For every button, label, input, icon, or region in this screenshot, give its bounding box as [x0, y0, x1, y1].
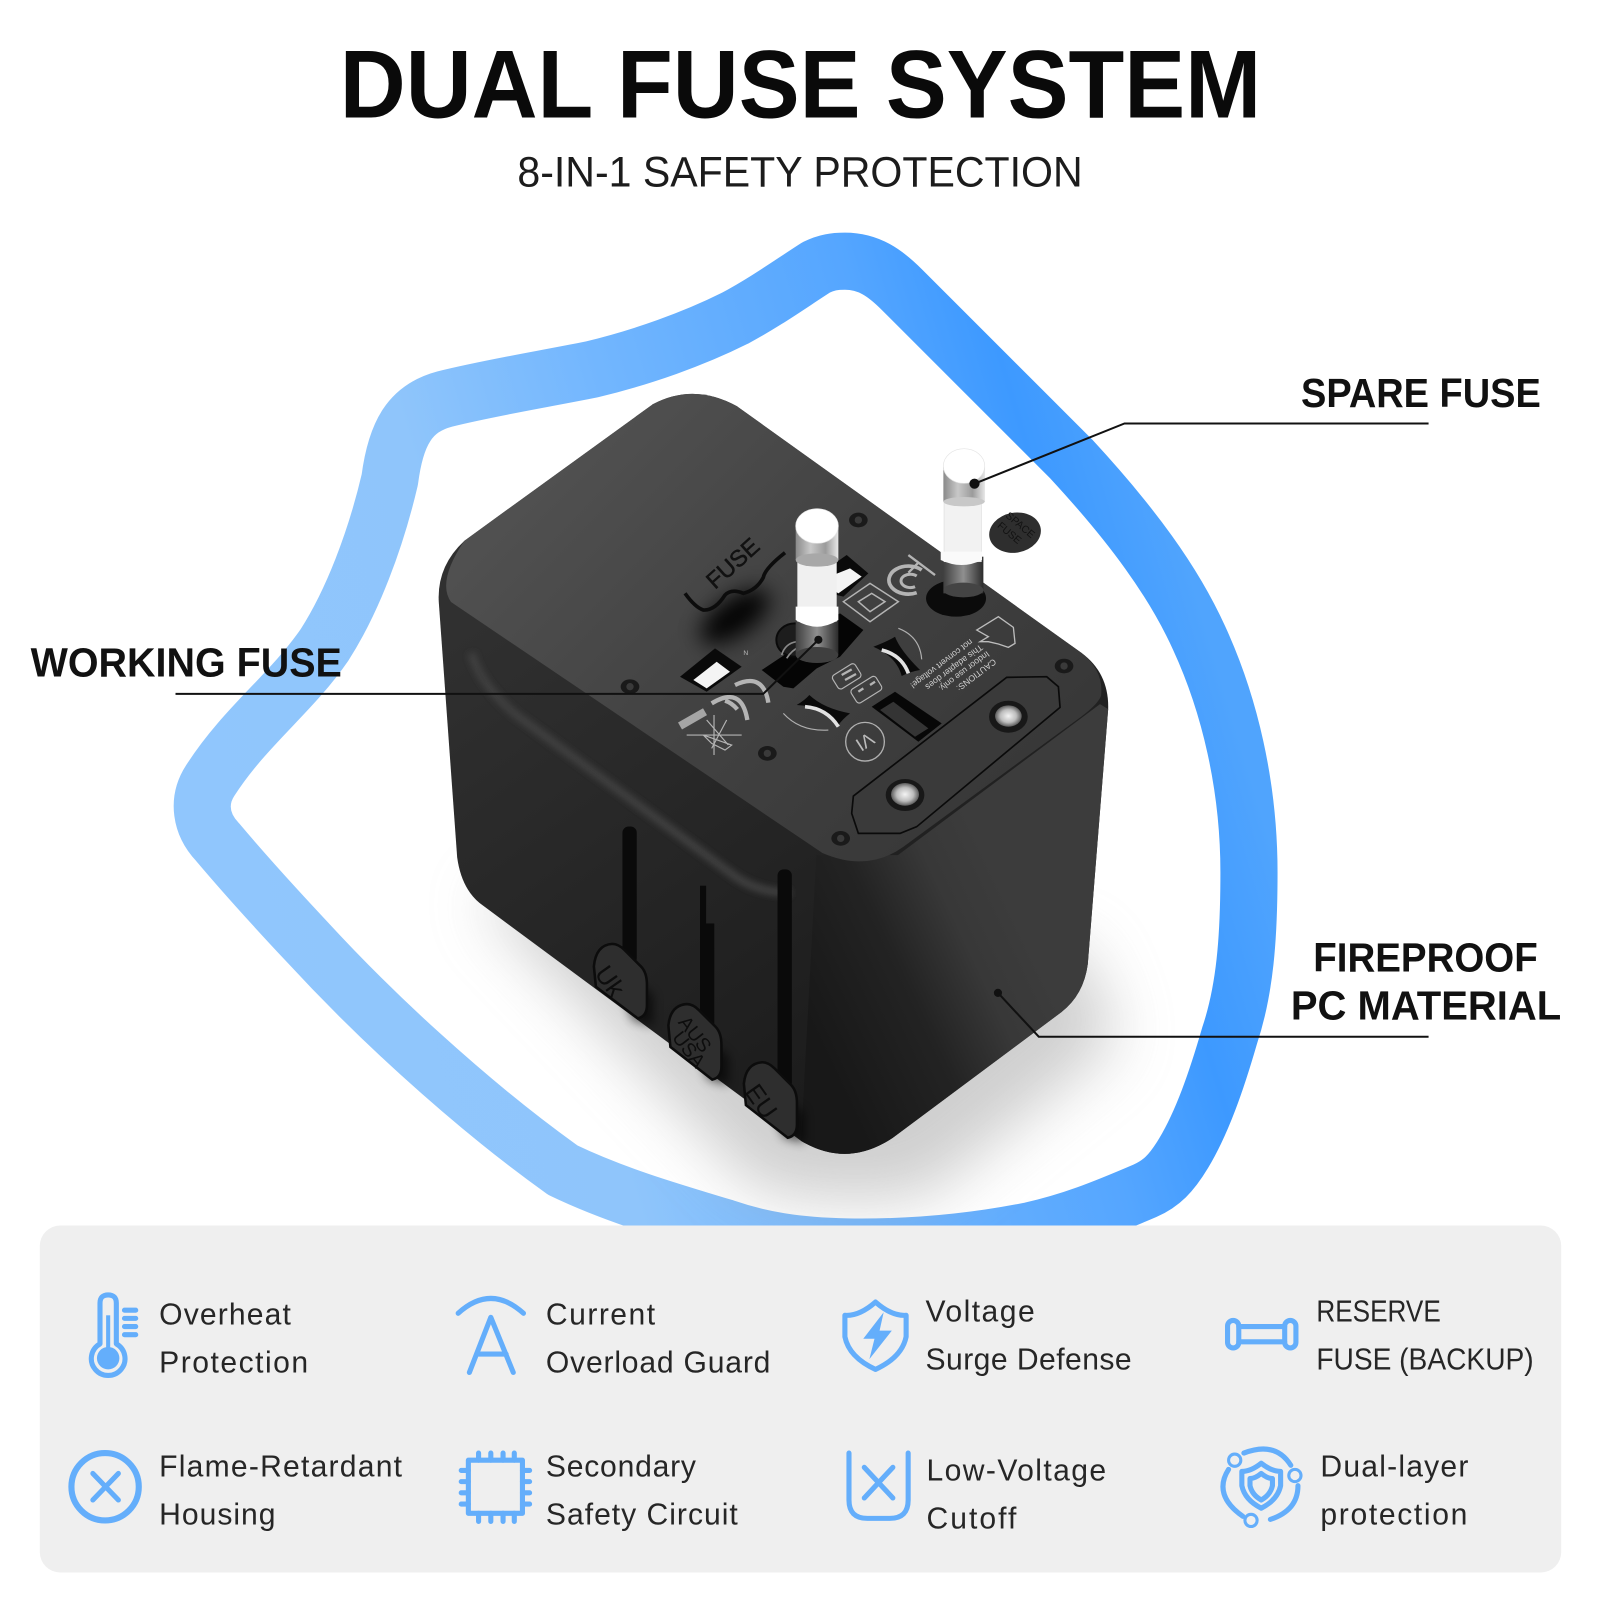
slider slots [622, 827, 792, 1089]
text: reserve fuse backup: FUSE (BACKUP) [1316, 1343, 1534, 1376]
caution text: CAUTIONS: [955, 657, 998, 693]
callout line: spare fuse [969, 423, 1429, 489]
window N [680, 648, 742, 692]
fuse socket ring [776, 623, 814, 657]
KC mark [889, 555, 935, 594]
label: fireproof material [1291, 934, 1561, 1028]
spare fuse cap disc: FUSE [995, 521, 1023, 547]
text: current overload guard [546, 1298, 770, 1379]
window N insert [693, 662, 730, 688]
spare fuse cap disc: SPACE [1003, 511, 1037, 541]
text: low voltage cutoff [927, 1455, 1106, 1536]
slider button AUS USA: USA [667, 1027, 709, 1072]
text: voltage surge defense: Surge Defense [926, 1343, 1132, 1376]
label: fireproof material: FIREPROOF [1313, 934, 1538, 980]
caution text: not convert voltage! [908, 637, 975, 691]
text: secondary safety circuit: Safety Circuit [546, 1498, 738, 1531]
slider button UK [589, 944, 653, 1026]
text: flame retardant housing [159, 1451, 403, 1531]
icon: circuit chip [461, 1453, 530, 1521]
top face [446, 394, 1101, 861]
screw centres [626, 516, 1068, 842]
text: dual layer protection: protection [1320, 1498, 1467, 1531]
VI badge [846, 722, 884, 761]
VI badge: VI [852, 728, 878, 755]
slider button EU: EU [739, 1079, 782, 1124]
spare fuse cap disc [986, 508, 1044, 557]
flap label: FUSE [701, 533, 765, 594]
panel: features [40, 1226, 1561, 1572]
text: low voltage cutoff: Low-Voltage [927, 1455, 1106, 1488]
USB slot [872, 692, 942, 742]
text: flame retardant housing: Housing [159, 1498, 276, 1531]
icon: thermometer [91, 1295, 136, 1375]
text: dual layer protection [1320, 1451, 1468, 1531]
icon: current ampere [458, 1298, 523, 1372]
fuse spring [782, 642, 800, 658]
WEEE bin [687, 715, 742, 755]
icon: flame retardant [71, 1453, 139, 1520]
fuse socket [762, 613, 863, 688]
adapter right side [801, 704, 1108, 1154]
text: overheat protection [159, 1298, 308, 1379]
caution text: Indoor use only. [937, 649, 992, 694]
N mark: N [743, 650, 748, 657]
fuse cover flap [685, 553, 785, 610]
callout line: fireproof material [994, 989, 1429, 1037]
plug plate [852, 677, 1060, 833]
text: overheat protection: Protection [159, 1346, 308, 1379]
socket contact lower [783, 695, 850, 730]
slider button UK: Uk [589, 961, 630, 1003]
subtitle: 8-IN-1 SAFETY PROTECTION [517, 149, 1083, 197]
text: secondary safety circuit [546, 1451, 738, 1531]
spare fuse [941, 449, 985, 597]
travel adapter [439, 394, 1108, 1154]
text: current overload guard: Current [546, 1298, 656, 1331]
USB tongue [880, 702, 928, 737]
window upper insert [833, 568, 862, 593]
adapter body silhouette [439, 394, 1108, 1154]
slider button EU [739, 1062, 804, 1143]
top face details [621, 449, 1073, 846]
icon: reserve fuse [1228, 1320, 1296, 1348]
shield outline [202, 261, 1249, 1247]
plug pin left [886, 779, 924, 811]
label: working fuse: WORKING FUSE [31, 640, 342, 686]
icon: dual layer shield [1223, 1449, 1301, 1527]
CE mark [712, 681, 768, 720]
flap shadow [692, 579, 778, 655]
label: spare fuse: SPARE FUSE [1301, 370, 1541, 416]
text: reserve fuse backup: RESERVE [1316, 1295, 1441, 1328]
icon box pair [831, 663, 883, 704]
socket contact upper [873, 628, 922, 676]
slider button AUS USA [667, 1004, 729, 1085]
text: voltage surge defense [926, 1295, 1132, 1376]
text: dual layer protection: Dual-layer [1320, 1451, 1468, 1484]
caution text [908, 637, 998, 694]
window upper [830, 555, 868, 597]
callout line: working fuse [176, 636, 822, 694]
title: DUAL FUSE SYSTEM [340, 29, 1261, 138]
panel background [40, 1226, 1561, 1572]
icon: voltage shield [845, 1302, 906, 1369]
screws [621, 513, 1073, 846]
direction arrow mark [977, 617, 1015, 647]
text: secondary safety circuit: Secondary [546, 1451, 696, 1484]
text: overheat protection: Overheat [159, 1298, 291, 1331]
text: flame retardant housing: Flame-Retardant [159, 1451, 403, 1484]
label: fireproof material: PC MATERIAL [1291, 982, 1561, 1028]
text: low voltage cutoff: Cutoff [927, 1503, 1017, 1536]
working fuse [796, 509, 838, 663]
text: voltage surge defense: Voltage [926, 1295, 1035, 1328]
ground shadow [480, 878, 1117, 1200]
diamond mark [843, 583, 898, 622]
class bar [680, 712, 705, 726]
slider button AUS USA: AUS [674, 1012, 716, 1057]
side ridge [471, 653, 791, 893]
icon: low voltage cutoff [849, 1453, 908, 1518]
text: current overload guard: Overload Guard [546, 1346, 770, 1379]
text: reserve fuse backup [1316, 1295, 1534, 1376]
plug pin right [989, 701, 1028, 733]
spare fuse base [926, 580, 986, 617]
caution text: This adapter does [923, 642, 985, 693]
